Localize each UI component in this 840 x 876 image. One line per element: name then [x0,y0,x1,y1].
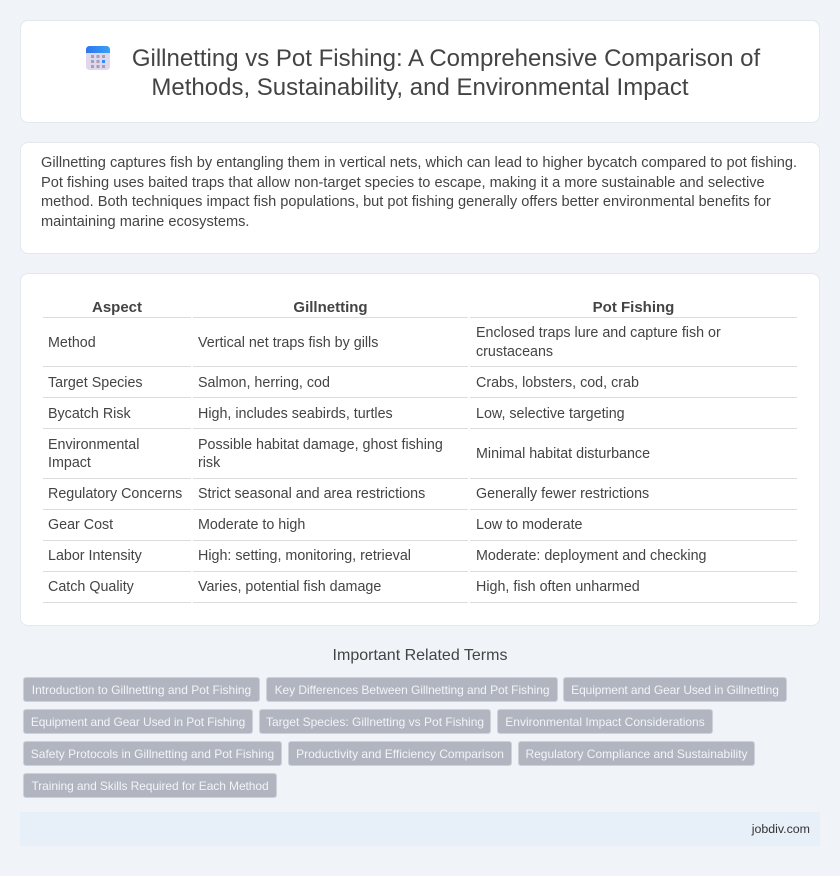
related term chips: Productivity and Efficiency Comparison [296,747,504,761]
table: Moderate: deployment and checking [476,548,706,564]
intro text: method. Both techniques impact fish populations, but pot fishing generally offers better environmental benefits for [41,194,771,210]
table [43,299,797,603]
panel: intro [20,142,820,254]
related term chips: Key Differences Between Gillnetting and Pot Fishing [275,683,549,697]
table: Salmon, herring, cod [198,375,330,391]
title: Methods, Sustainability, and Environmental Impact [151,74,689,101]
table: Varies, potential fish damage [198,579,381,595]
table: risk [198,455,220,471]
table: Gillnetting [293,299,368,316]
table: Aspect [92,299,142,316]
title [132,45,760,101]
table: Possible habitat damage, ghost fishing [198,437,443,453]
table: High: setting, monitoring, retrieval [198,548,411,564]
table: Minimal habitat disturbance [476,446,650,462]
related term chips: Equipment and Gear Used in Gillnetting [571,683,779,697]
footer source text: jobdiv.com [752,822,810,836]
table: Impact [48,455,91,471]
table: Gear Cost [48,517,113,533]
related term chips: Target Species: Gillnetting vs Pot Fishing [266,715,484,729]
related term chips: Training and Skills Required for Each Method [31,779,269,793]
panel: header [20,20,820,123]
table: High, includes seabirds, turtles [198,406,393,422]
table: Labor Intensity [48,548,142,564]
title: Gillnetting vs Pot Fishing: A Comprehensive Comparison of [132,45,760,72]
table: Generally fewer restrictions [476,486,649,502]
related term chips: Environmental Impact Considerations [505,715,705,729]
related term chips: Equipment and Gear Used in Pot Fishing [31,715,245,729]
table: Strict seasonal and area restrictions [198,486,425,502]
table: Catch Quality [48,579,134,595]
table: Crabs, lobsters, cod, crab [476,375,639,391]
intro text: Gillnetting captures fish by entangling them in vertical nets, which can lead to higher bycatch compared to pot fishing. [41,155,797,171]
table: Vertical net traps fish by gills [198,335,378,351]
table: Pot Fishing [593,299,674,316]
table: Low to moderate [476,517,582,533]
related term chips: Safety Protocols in Gillnetting and Pot Fishing [31,747,274,761]
intro text: maintaining marine ecosystems. [41,214,249,230]
intro text [41,155,797,230]
table: High, fish often unharmed [476,579,640,595]
heading: related terms: Important Related Terms [333,647,507,664]
table: Regulatory Concerns [48,486,182,502]
panel: comparison table [20,273,820,626]
table: Bycatch Risk [48,406,131,422]
table: Target Species [48,375,143,391]
intro text: Pot fishing uses baited traps that allow non-target species to escape, making it a more sustainable and selective [41,175,765,191]
table: crustaceans [476,344,553,360]
table: Enclosed traps lure and capture fish or [476,325,721,341]
icon: calendar [86,46,110,70]
table: Moderate to high [198,517,305,533]
table: Environmental [48,437,139,453]
footer [20,812,820,846]
related term chips: Regulatory Compliance and Sustainability [525,747,748,761]
table: Method [48,335,96,351]
related term chips: Introduction to Gillnetting and Pot Fishing [32,683,251,697]
table: Low, selective targeting [476,406,625,422]
